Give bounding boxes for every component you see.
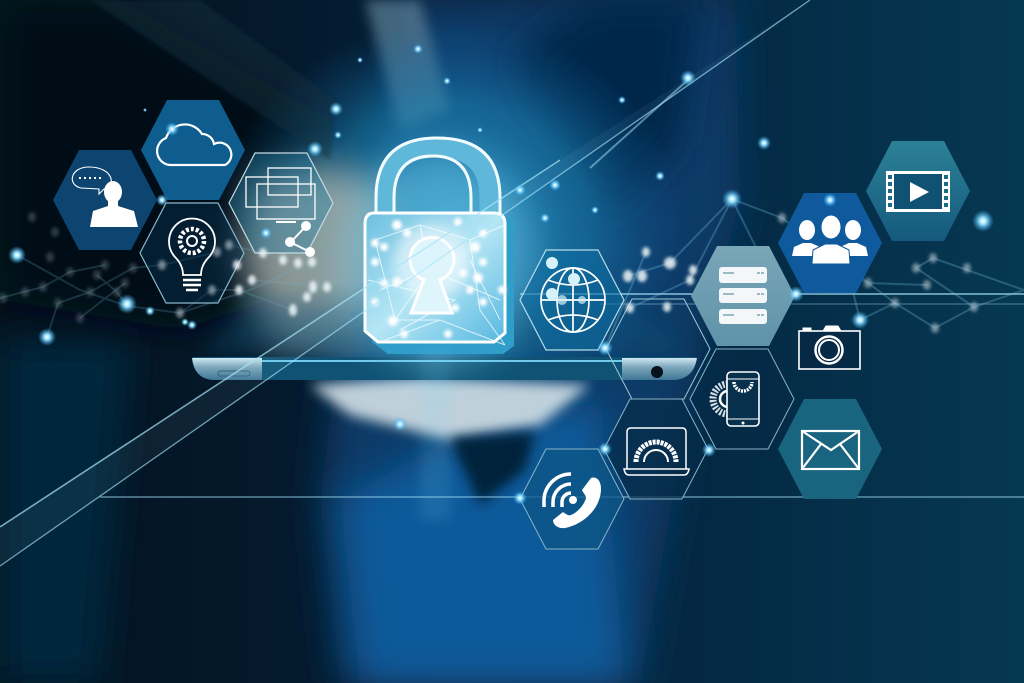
padlock [345,138,535,370]
icon: gear [713,384,728,414]
hexagon: cloud [141,100,245,200]
hexagon: video [866,141,970,241]
icon: person with speech bubble [90,181,138,227]
hexagon: phone call [520,449,624,549]
icon: handset [553,478,601,528]
top left wedge [90,0,335,160]
network mesh [368,225,505,345]
padlock body [372,218,514,354]
icon: laptop with gear [624,428,689,475]
icon: camera [799,326,860,369]
beam wedge [0,0,810,566]
hexagon: laptop [604,399,708,499]
icon: wifi signal [544,474,571,507]
tablet [192,300,697,380]
hexagon: person [53,150,157,250]
padlock shackle [376,138,500,222]
hexagon: mail [778,399,882,499]
right network [605,199,1024,348]
icon: windows and nodes [246,168,315,252]
vertical light [420,350,450,520]
left network [0,245,327,337]
hexagon: globe [520,250,624,350]
icon: bulb [169,219,215,290]
icon: globe [541,268,605,332]
hexagon: light bulb [140,203,244,303]
icon: smartphone [727,372,759,426]
network nodes [0,212,978,333]
hexagon: smartphone [690,349,794,449]
icon: envelope [802,431,859,469]
glowing nodes [8,44,994,505]
icon: video player [886,171,950,212]
hexagon: tablet corner [606,299,710,399]
keyhole [410,238,454,313]
hexagon: people [778,193,882,293]
hexagon: windows [229,153,333,257]
icon: people [792,215,868,264]
keyhole glow [394,224,470,300]
icon: servers [719,267,767,324]
icon: cloud [157,124,231,165]
blurred person [0,0,740,683]
hexagon: servers [691,246,795,346]
